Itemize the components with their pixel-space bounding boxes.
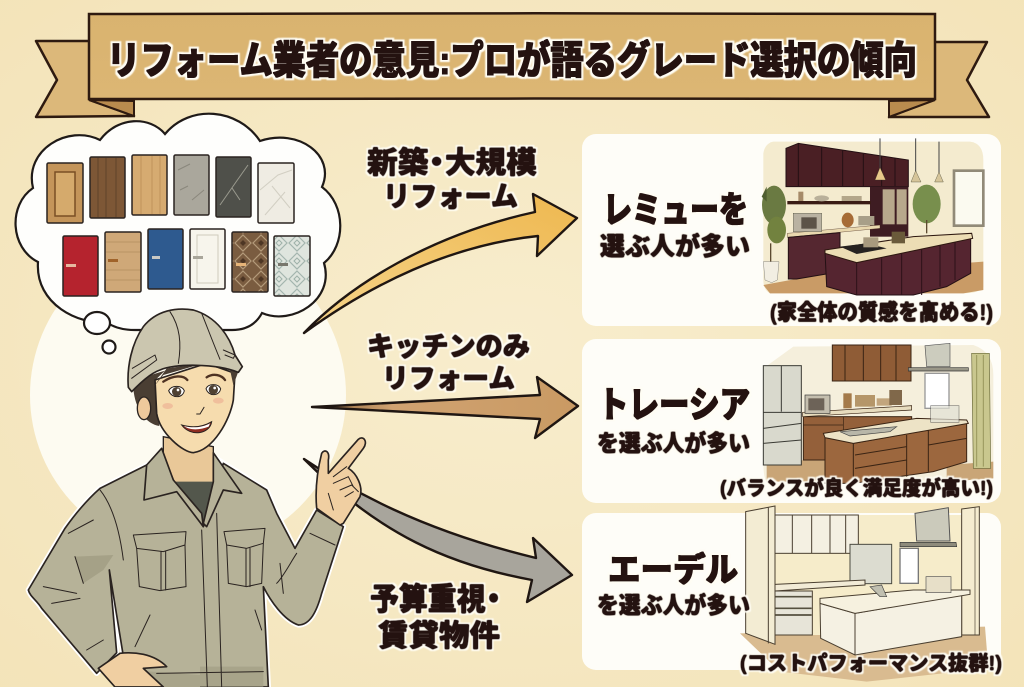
label: budget / rental: 予算重視・ bbox=[370, 582, 508, 617]
jacket silhouette halo bbox=[28, 457, 343, 687]
sample: brown pattern door bbox=[232, 232, 268, 292]
panel: Remyu bbox=[582, 134, 1001, 326]
thought dot large bbox=[84, 312, 110, 334]
ear bbox=[137, 397, 151, 420]
panel: Tracia bbox=[582, 339, 1001, 503]
worker character bbox=[28, 309, 365, 687]
sample: dark marble bbox=[216, 157, 251, 217]
arrow: gold to first option bbox=[304, 194, 577, 333]
arrow: brown to second option bbox=[312, 377, 578, 438]
label: new build bbox=[367, 147, 537, 212]
note: Edel: (コストパフォーマンス抜群!) bbox=[740, 652, 1002, 675]
left collar bbox=[144, 448, 203, 527]
jacket bbox=[28, 448, 343, 687]
hair back bbox=[133, 371, 165, 426]
panel card bbox=[582, 339, 1001, 503]
white glow circle behind worker bbox=[30, 237, 346, 553]
hand on hip bbox=[98, 653, 167, 687]
kitchen illustration: mid wood bbox=[763, 343, 993, 483]
subtext: を選ぶ人が多い bbox=[597, 430, 750, 456]
panel card bbox=[582, 134, 1001, 326]
label: kitchen only: キッチンのみ bbox=[367, 332, 530, 362]
label: kitchen only: リフォーム bbox=[382, 364, 515, 394]
thought dot small bbox=[102, 340, 116, 354]
ribbon right tail bbox=[889, 42, 989, 117]
kitchen illustration: dark wood bbox=[762, 138, 983, 295]
smile bbox=[182, 422, 212, 433]
ribbon left tail bbox=[36, 41, 134, 117]
panel card bbox=[582, 513, 1001, 670]
note: (家全体の質感を高める!) bbox=[770, 300, 993, 325]
headline: Remyu: レミューを bbox=[603, 189, 748, 230]
material samples bbox=[47, 155, 310, 296]
panel: Edel bbox=[582, 506, 1001, 682]
face bbox=[155, 363, 235, 453]
kitchen illustration: white bbox=[740, 506, 988, 682]
eyes bbox=[169, 385, 221, 397]
hard hat bbox=[128, 309, 242, 392]
sample: white panel door bbox=[190, 229, 225, 289]
nose and blush bbox=[162, 398, 224, 414]
eyebrows bbox=[163, 375, 225, 382]
sample: walnut bbox=[90, 157, 125, 218]
pointing hand bbox=[316, 438, 365, 525]
sample: red door bbox=[63, 236, 98, 296]
thought bubble bbox=[16, 114, 340, 354]
sample: oak framed door bbox=[47, 163, 83, 223]
label: budget / rental bbox=[370, 582, 508, 653]
undershirt bbox=[172, 482, 213, 527]
right pocket bbox=[224, 528, 265, 587]
title ribbon bbox=[36, 13, 989, 117]
sample: green pattern door bbox=[274, 236, 310, 296]
ribbon left fold bbox=[89, 100, 134, 116]
headline: Edel: エーデル bbox=[608, 551, 738, 588]
label: new build: 新築・大規模 bbox=[367, 147, 537, 180]
subtext: 選ぶ人が多い bbox=[600, 232, 750, 261]
sample: grey stone bbox=[174, 155, 209, 215]
cloud bbox=[16, 114, 340, 330]
sample: white marble bbox=[258, 163, 294, 223]
label: budget / rental: 賃貸物件 bbox=[378, 619, 500, 653]
sample: light wood bbox=[132, 155, 167, 215]
label: new build: リフォーム bbox=[383, 181, 518, 212]
subtext: を選ぶ人が多い bbox=[597, 592, 750, 618]
label: kitchen only bbox=[367, 332, 530, 394]
headline: Tracia: トレーシア bbox=[598, 384, 750, 425]
note: Tracia: (バランスが良く満足度が高い!) bbox=[720, 476, 993, 500]
ribbon main band bbox=[89, 13, 935, 99]
sample: horizontal wood door bbox=[105, 232, 141, 292]
left pocket bbox=[133, 532, 186, 591]
right collar bbox=[203, 453, 242, 527]
arrow: grey to third option bbox=[304, 459, 572, 602]
hair front bbox=[153, 363, 238, 387]
ribbon right fold bbox=[889, 100, 935, 117]
sample: blue door bbox=[148, 229, 183, 289]
neck bbox=[163, 437, 213, 513]
